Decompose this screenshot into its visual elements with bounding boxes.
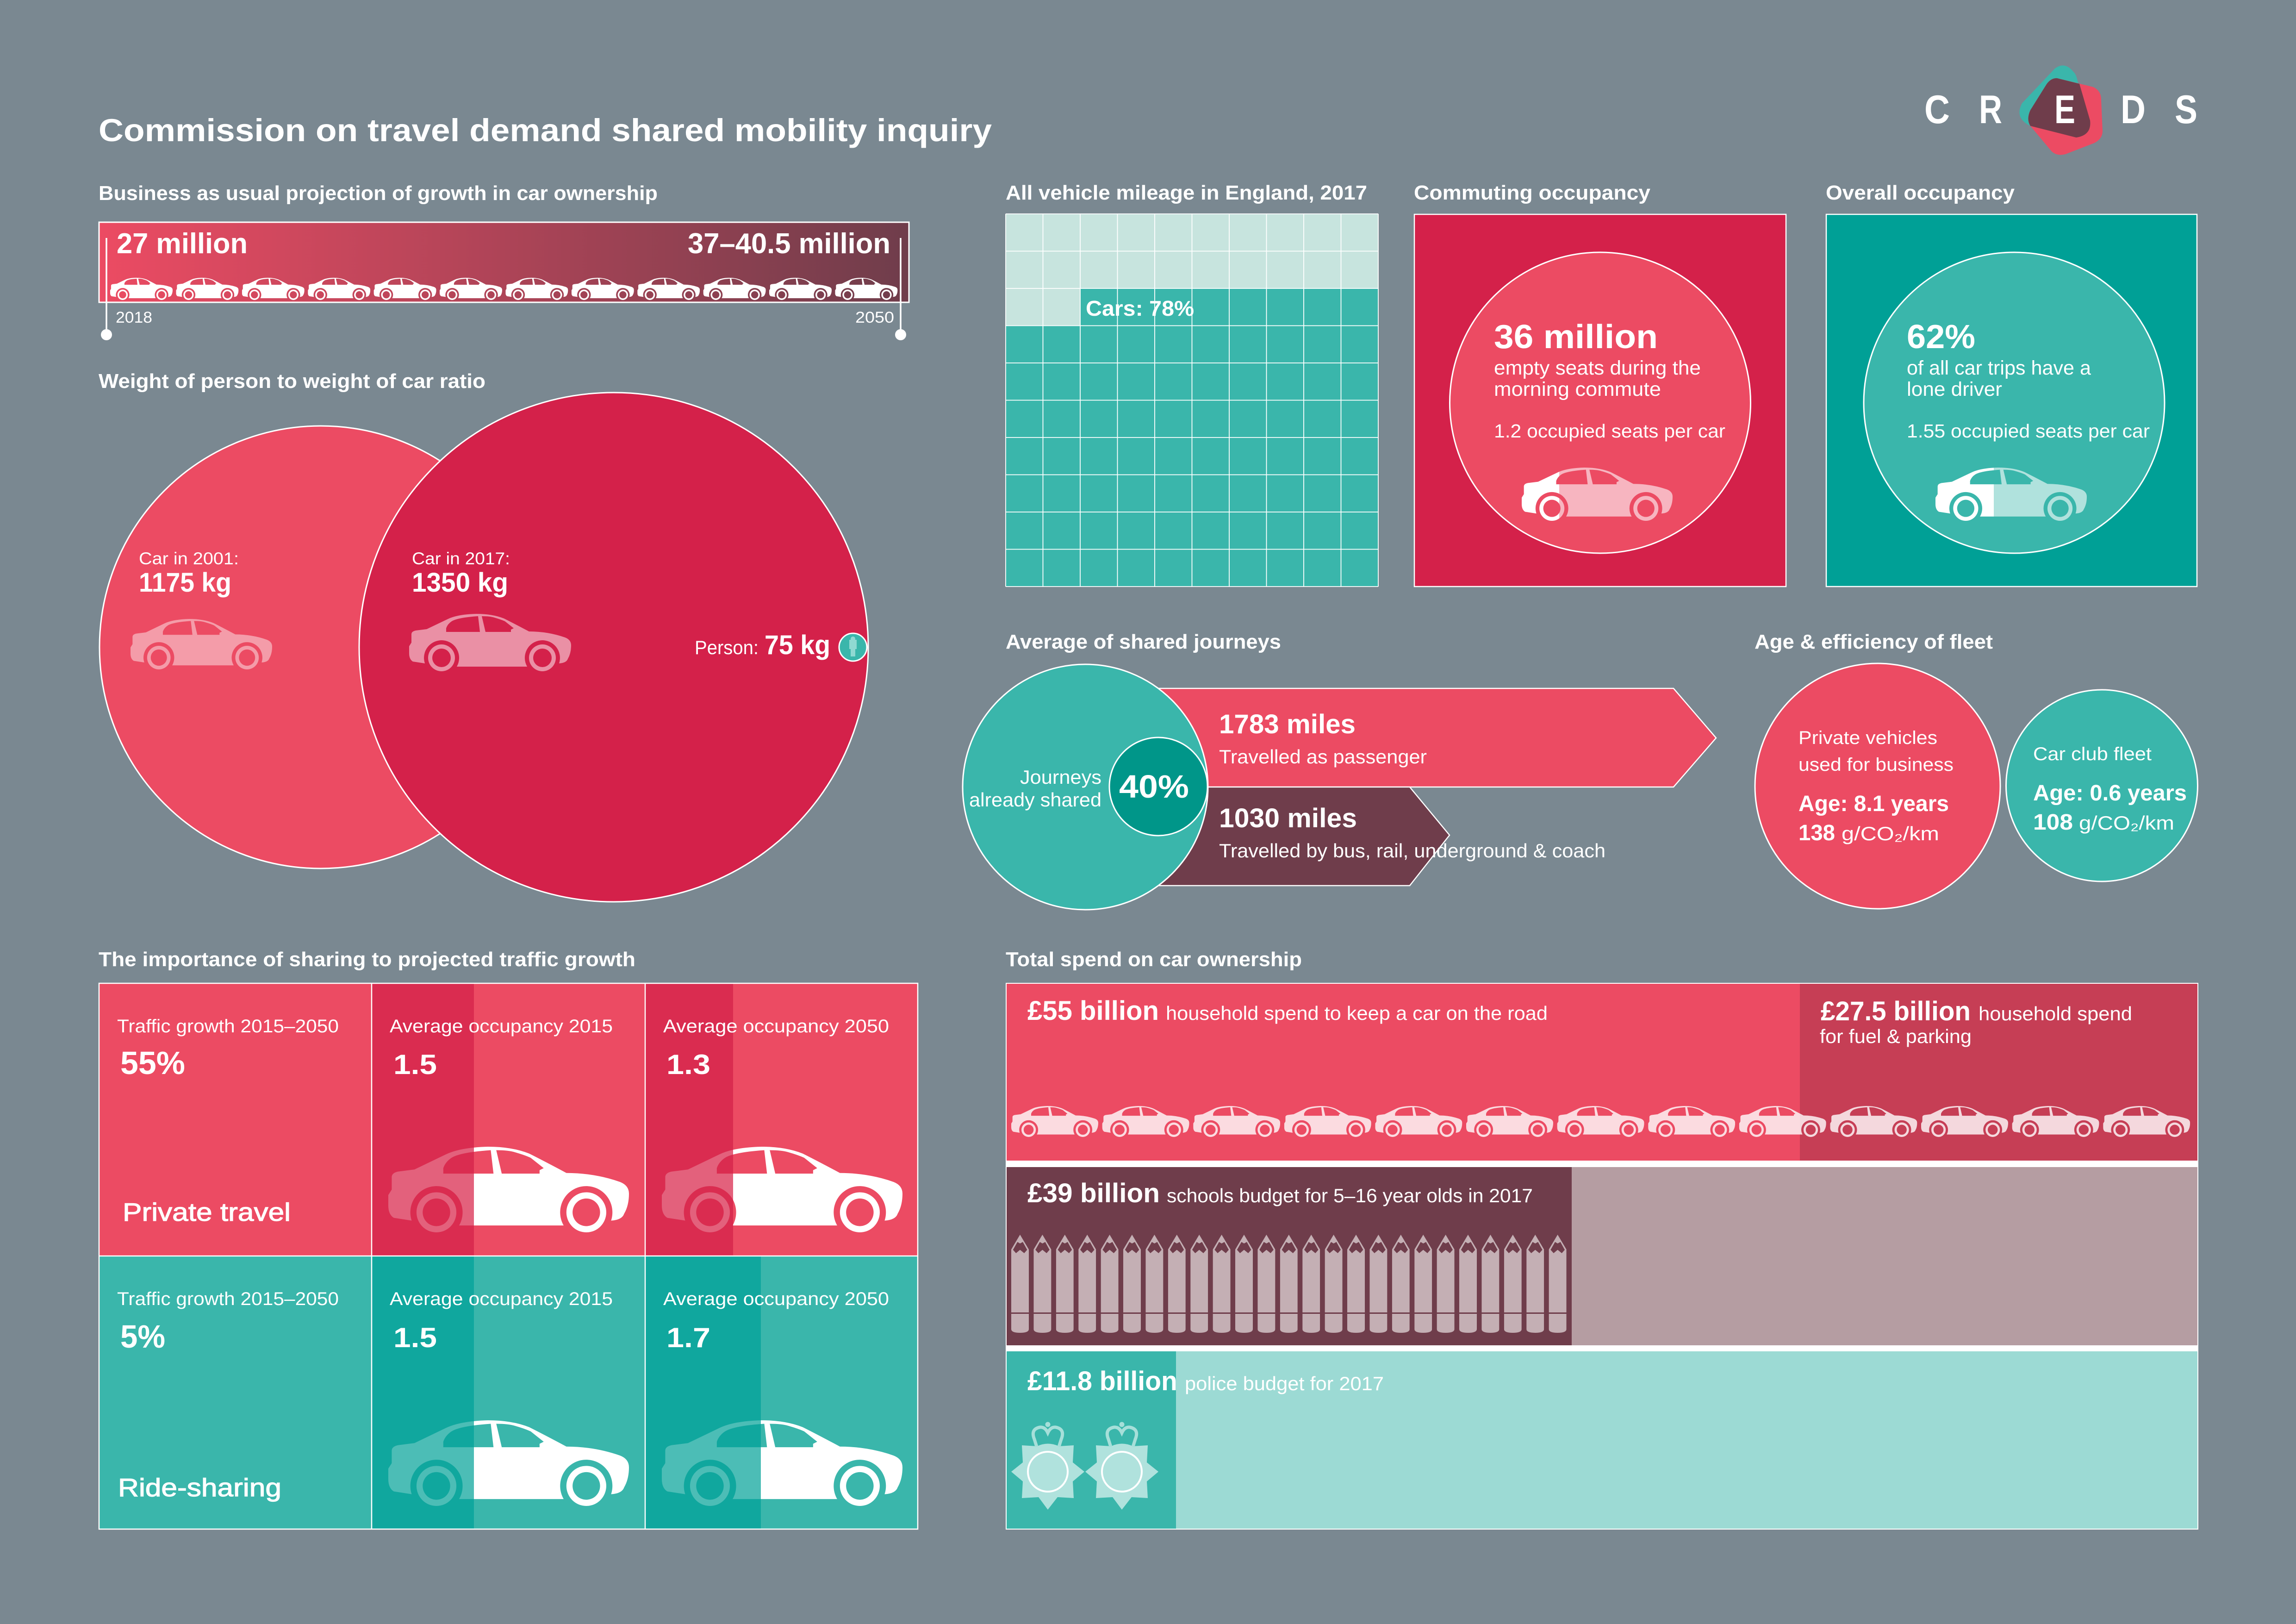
heading: total spend: Total spend on car ownership — [1006, 948, 1302, 971]
logo: CREDS: D — [2121, 87, 2146, 132]
panel: car ownership growth bar: 2018 — [116, 309, 152, 326]
chart: weight of person to car circles: 1350 kg — [412, 568, 508, 598]
row: ride-sharing: Average occupancy 2050 — [663, 1289, 889, 1309]
panel: car ownership growth bar: 2050 — [855, 309, 894, 326]
chart: weight of person to car circles: 1175 kg — [139, 568, 231, 598]
row: ride-sharing: 1.5 — [393, 1322, 437, 1353]
heading: overall occupancy: Overall occupancy — [1826, 181, 2015, 204]
row: ride-sharing — [99, 1256, 918, 1529]
row: ride-sharing: Average occupancy 2015 — [390, 1289, 613, 1309]
circle: private vehicles fleet: used for business — [1798, 755, 1954, 775]
panel: overall occupancy: lone driver — [1907, 378, 2002, 400]
arrow: passenger miles — [1129, 688, 1716, 787]
chart: weight of person to car circles: 75 kg — [765, 630, 830, 660]
circle: car club fleet — [2006, 690, 2197, 881]
circle: private vehicles fleet: 138 — [1798, 821, 1835, 845]
bar: police budget — [1007, 1351, 2197, 1529]
circle: private vehicles fleet — [1755, 663, 2000, 909]
panel: importance of sharing grid — [99, 983, 918, 1529]
heading: importance of sharing: The importance of sharing to projected traffic growth — [99, 948, 635, 971]
row: private travel: Average occupancy 2050 — [663, 1016, 889, 1037]
chart: weight of person to car circles: Person: — [695, 637, 759, 658]
circle: car club fleet: Age: 0.6 years — [2033, 781, 2187, 806]
logo: CREDS: E — [2054, 87, 2075, 132]
bar: household spend on cars: household spend — [1979, 1003, 2132, 1024]
circle: 40 percent — [1109, 737, 1207, 836]
bar: police budget: police budget for 2017 — [1185, 1373, 1384, 1394]
bar: household spend on cars — [1007, 984, 2197, 1161]
chart: shared journeys circles and arrows — [963, 664, 1716, 910]
heading: commuting occupancy: Commuting occupancy — [1414, 181, 1651, 204]
chart: waffle grid of vehicle mileage — [1006, 214, 1378, 587]
row: ride-sharing: Ride-sharing — [118, 1473, 281, 1502]
panel: overall occupancy: of all car trips have a — [1907, 357, 2091, 379]
logo: CREDS: R — [1979, 87, 2002, 132]
panel: car ownership growth bar: 27 million — [117, 228, 248, 260]
bar: schools budget — [1007, 1167, 2197, 1345]
chart: weight of person to car circles — [100, 393, 868, 902]
heading: age and efficiency: Age & efficiency of fleet — [1755, 631, 1993, 653]
chart: waffle grid of vehicle mileage: Cars: 78% — [1086, 296, 1194, 320]
circle: journeys already shared — [963, 664, 1208, 910]
panel: commuting occupancy: morning commute — [1494, 378, 1661, 400]
panel: total spend backing — [1006, 983, 2198, 1530]
panel: commuting occupancy: empty seats during the — [1494, 357, 1701, 379]
chart: shared journeys circles and arrows: Travelled as passenger — [1219, 746, 1427, 768]
row: ride-sharing: 5% — [120, 1318, 165, 1355]
circle: car club fleet: Car club fleet — [2033, 744, 2152, 764]
row: private travel: 55% — [120, 1045, 185, 1081]
bar: schools budget: schools budget for 5–16 year olds in 2017 — [1167, 1185, 1533, 1206]
circle: private vehicles fleet: Age: 8.1 years — [1798, 792, 1949, 816]
circle: car club fleet: g/CO₂/km — [2079, 812, 2174, 834]
chart: shared journeys circles and arrows: Travelled by bus, rail, underground & coach — [1219, 840, 1605, 862]
heading: mileage: All vehicle mileage in England, 2017 — [1006, 181, 1367, 204]
panel: commuting occupancy: 1.2 occupied seats per car — [1494, 420, 1725, 442]
row: ride-sharing: 1.7 — [666, 1322, 710, 1353]
circle: private vehicles fleet: g/CO₂/km — [1842, 823, 1939, 844]
circle: private vehicles fleet: Private vehicles — [1798, 728, 1937, 748]
row: private travel: 1.3 — [666, 1049, 710, 1080]
row: private travel — [99, 983, 918, 1256]
circle: car club fleet: 108 — [2033, 810, 2073, 835]
bar: schools budget: £39 billion — [1027, 1178, 1160, 1208]
panel: overall occupancy — [1826, 214, 2197, 587]
bar: household spend on cars: £55 billion — [1027, 996, 1159, 1026]
row: private travel: Private travel — [123, 1198, 291, 1226]
logo: CREDS — [1924, 65, 2197, 155]
panel: commuting occupancy — [1414, 214, 1786, 587]
panel: commuting occupancy: 36 million — [1494, 319, 1658, 356]
bar: police budget: £11.8 billion — [1027, 1366, 1177, 1396]
row: private travel: Average occupancy 2015 — [390, 1016, 613, 1037]
heading: weight ratio: Weight of person to weight of car ratio — [99, 370, 485, 393]
logo: CREDS: S — [2175, 87, 2197, 132]
label: 40 percent text: 40% — [1119, 768, 1189, 805]
bar: household spend on cars: £27.5 billion — [1821, 996, 1971, 1026]
chart: shared journeys circles and arrows: 1030 miles — [1219, 803, 1357, 833]
chart: shared journeys circles and arrows: already shared — [969, 789, 1101, 811]
heading: shared journeys: Average of shared journeys — [1006, 631, 1281, 653]
chart: weight of person to car circles: Car in 2001: — [139, 549, 239, 568]
bar: household spend on cars: household spend to keep a car on the road — [1166, 1002, 1548, 1024]
bar: household spend on cars: for fuel & parking — [1820, 1025, 1972, 1047]
row: private travel: Traffic growth 2015–2050 — [117, 1016, 339, 1037]
arrow: public transport miles — [1129, 787, 1450, 886]
panel: car ownership growth bar: 37–40.5 million — [688, 228, 890, 260]
row: private travel: 1.5 — [393, 1049, 437, 1080]
panel: car ownership growth bar — [99, 222, 909, 340]
title: Commission on travel demand shared mobility inquiry — [99, 112, 992, 148]
panel: overall occupancy: 62% — [1907, 319, 1975, 356]
heading: car ownership growth: Business as usual projection of growth in car ownership — [99, 182, 658, 205]
row: ride-sharing: Traffic growth 2015–2050 — [117, 1289, 339, 1309]
label: journeys already shared: Journeys — [1020, 766, 1101, 788]
chart: shared journeys circles and arrows: 1783 miles — [1219, 709, 1356, 739]
logo: CREDS: C — [1924, 87, 1950, 132]
panel: overall occupancy: 1.55 occupied seats per car — [1907, 420, 2150, 442]
chart: weight of person to car circles: Car in 2017: — [412, 549, 510, 568]
